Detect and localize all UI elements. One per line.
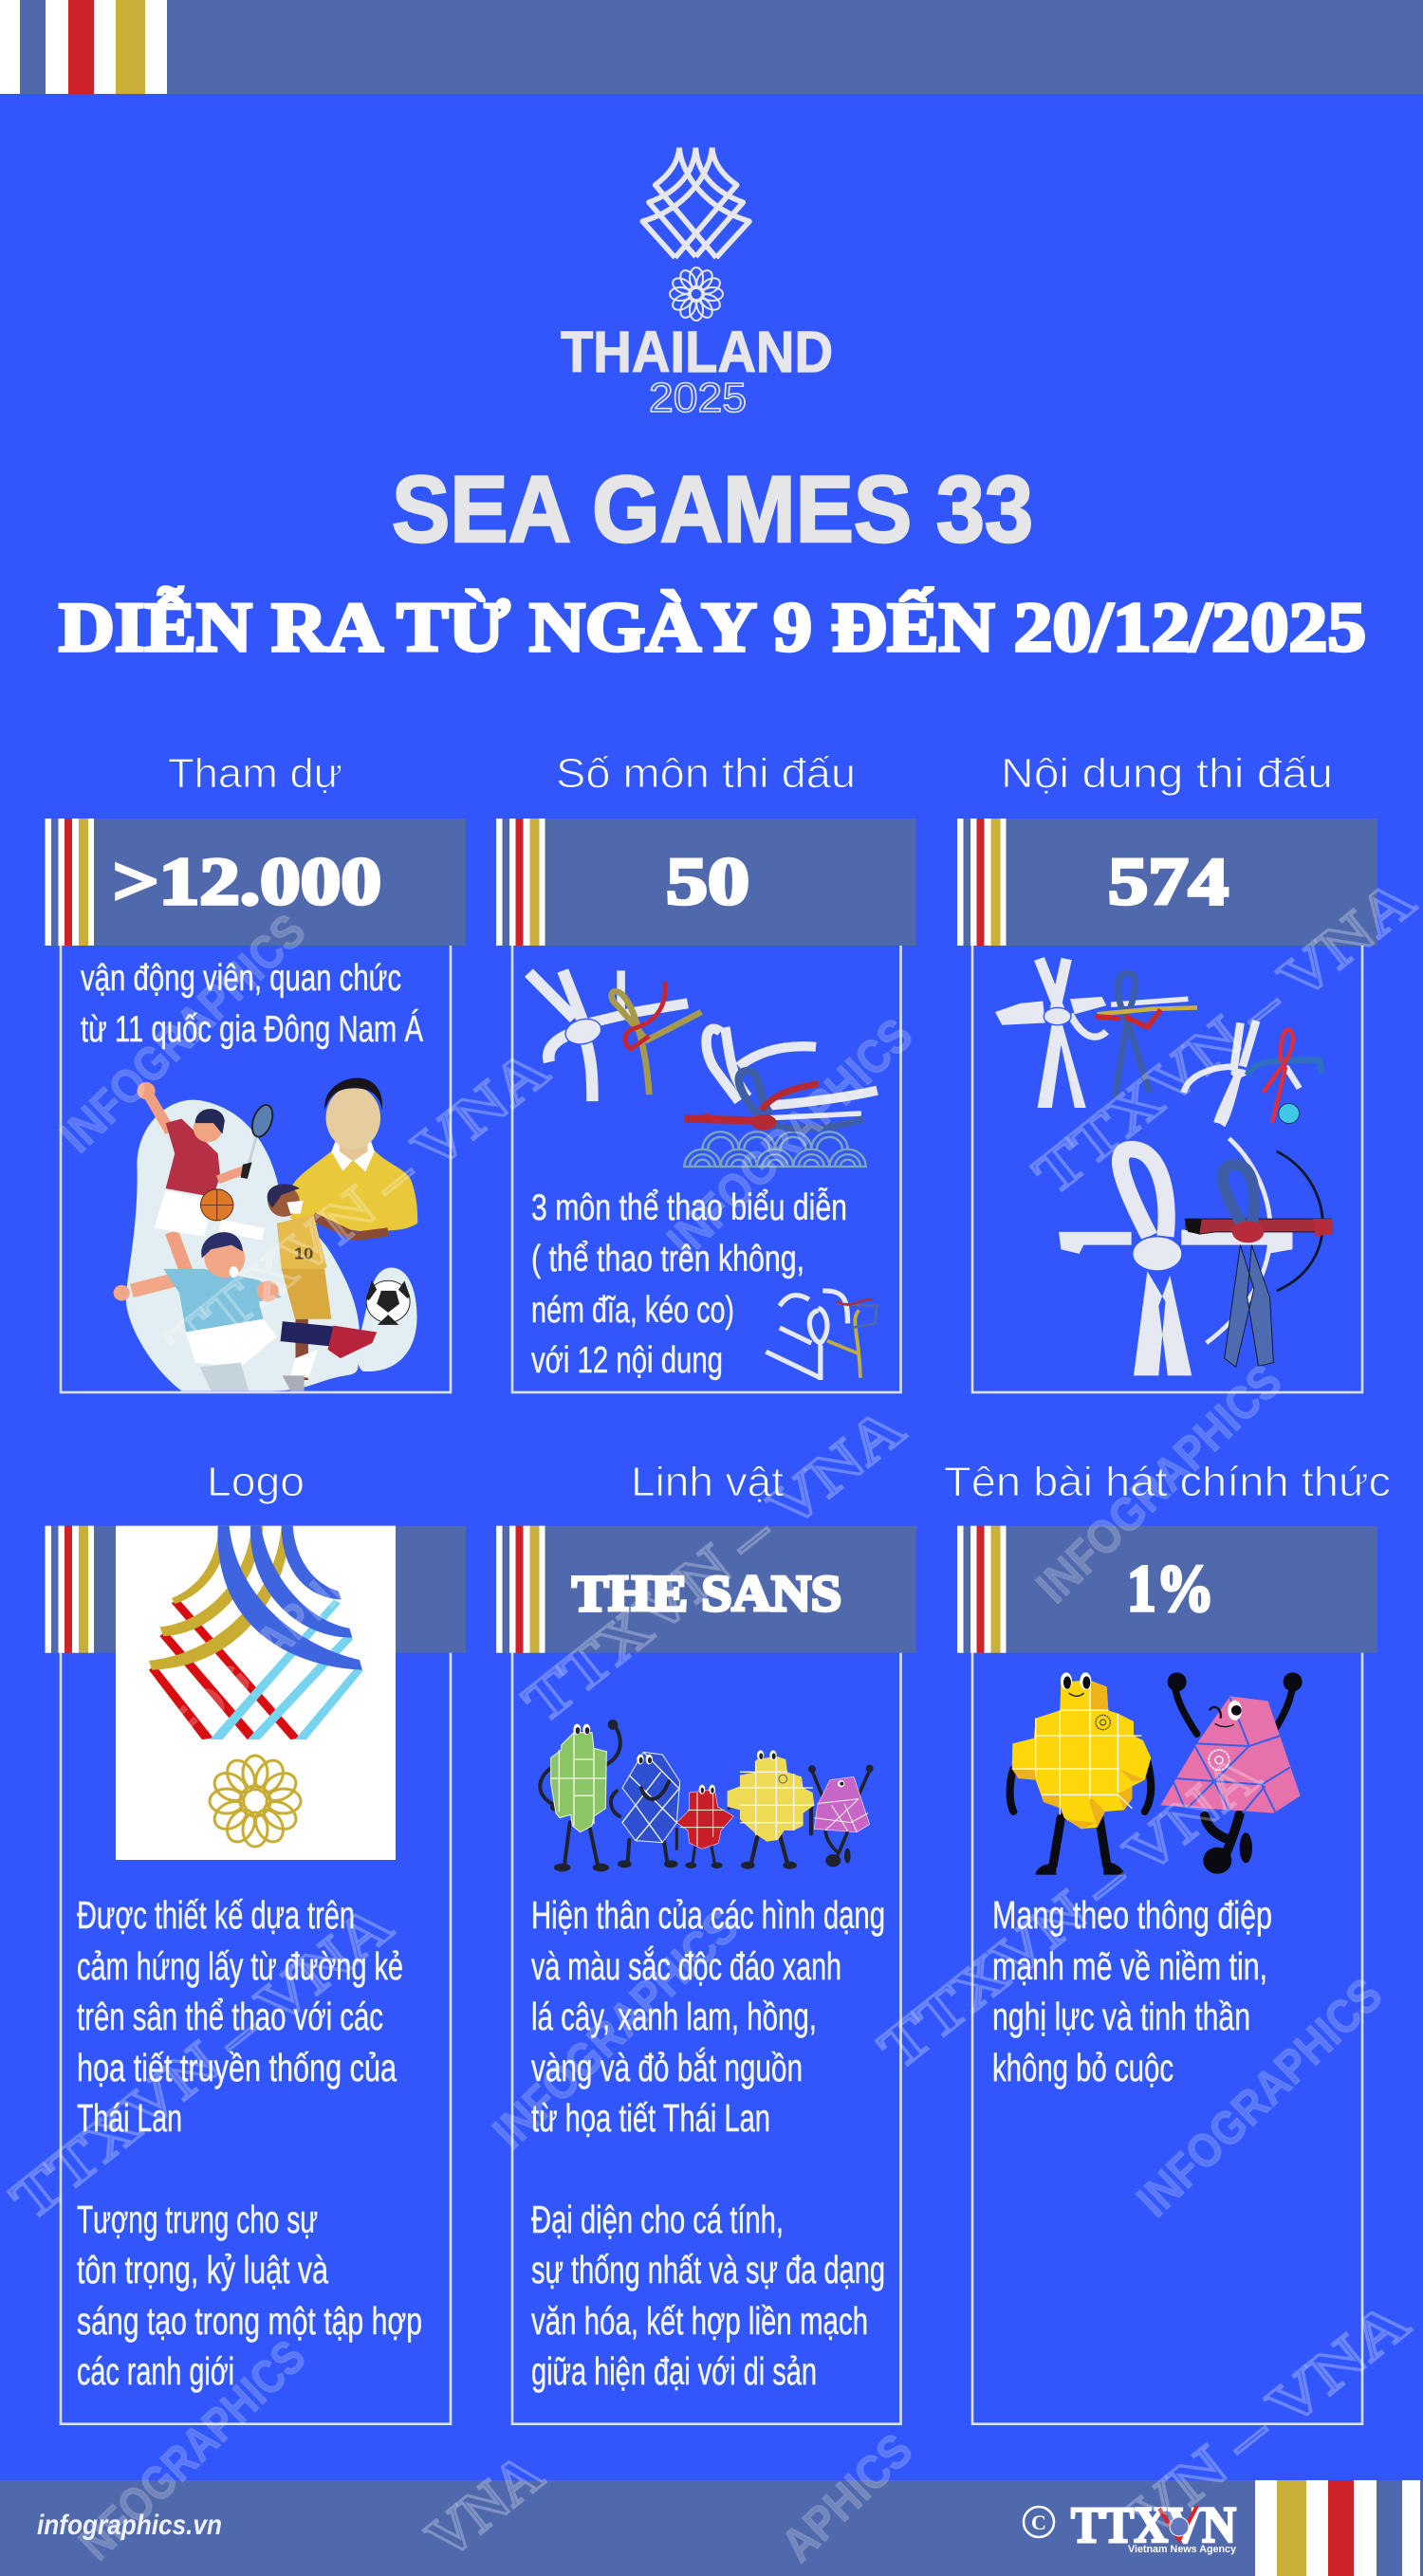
panel frame [512, 1612, 901, 2424]
description: Được thiết kế dựa trên [77, 1893, 355, 1937]
illustration: two large mascots [1010, 1672, 1303, 1875]
site name: infographics.vn [37, 2510, 222, 2541]
illustration: small ribbon [766, 1291, 878, 1380]
value: 574 [1108, 845, 1229, 919]
watermark overlay: TTXVN – VNA [511, 1396, 915, 1736]
icon: green mascot [540, 1720, 620, 1871]
description: và màu sắc độc đáo xanh [531, 1944, 841, 1988]
top header band with stripes [0, 0, 1423, 94]
description: tôn trọng, kỷ luật và [77, 2248, 328, 2291]
logo year: 2025 [649, 375, 747, 421]
description: Hiện thân của các hình dạng [531, 1893, 885, 1937]
icon: red mascot [676, 1785, 733, 1868]
icon: yellow mascot large [1010, 1672, 1151, 1875]
subtitle: dates: DIỄN RA TỪ NGÀY 9 ĐẾN 20/12/2025 [59, 587, 1366, 667]
description: vận động viên, quan chức [81, 958, 401, 999]
value: THE SANS [572, 1565, 841, 1622]
value bar [957, 1526, 1377, 1653]
illustration: archery ribbons [1059, 1138, 1333, 1375]
watermark overlay: INFOGRAPHICS [130, 1523, 396, 1782]
description: lá cây, xanh lam, hồng, [531, 1995, 817, 2038]
official logo on white card [116, 1526, 396, 1860]
heading: Tham dự [168, 750, 342, 797]
description: từ họa tiết Thái Lan [531, 2096, 770, 2140]
description [77, 1893, 422, 2393]
watermark overlay: TTXVN – VNA [867, 1742, 1271, 2082]
description [992, 1893, 1272, 2089]
logo wordmark: THAILAND [561, 320, 833, 384]
description [81, 958, 423, 1050]
copyright mark [1024, 2507, 1054, 2537]
heading: Tên bài hát chính thức [944, 1459, 1391, 1505]
watermark overlay: APHICS [771, 2423, 922, 2572]
illustration: shooting ribbons [995, 959, 1197, 1108]
watermark overlay: VNA [415, 2441, 555, 2571]
value bar [496, 819, 916, 946]
value bar [46, 1526, 466, 1653]
icon: purple mascot [808, 1765, 874, 1867]
watermark overlay: NFOGRAPHICS [69, 2329, 315, 2570]
watermark overlay [0, 868, 1423, 2572]
illustration: swimming ribbons [684, 1027, 878, 1167]
watermark overlay: VN – VNA [1116, 2290, 1421, 2550]
illustration: athletes: 10 [294, 1244, 313, 1262]
watermark overlay: INFOGRAPHICS [1127, 1968, 1393, 2227]
icon: pink mascot large [1160, 1672, 1303, 1874]
heading: Logo [207, 1459, 305, 1505]
description: văn hóa, kết hợp liền mạch [531, 2299, 868, 2343]
icon: blue mascot [611, 1752, 680, 1868]
watermark overlay: TTXVN – VNA [156, 1038, 560, 1377]
description: 3 môn thể thao biểu diễn [531, 1187, 847, 1228]
description: nghị lực và tinh thần [992, 1995, 1250, 2038]
description: giữa hiện đại với di sản [531, 2349, 817, 2393]
value bar [496, 1526, 916, 1653]
panel: Nội dung thi đấu [957, 750, 1377, 1392]
panel: Số môn thi đấu [496, 750, 916, 1392]
heading: Linh vật [631, 1459, 784, 1505]
heading: Số môn thi đấu [556, 750, 856, 797]
value bar [46, 819, 466, 946]
footer stripes [1255, 2480, 1420, 2576]
description: trên sân thể thao với các [77, 1995, 383, 2038]
copyright mark: C [1031, 2511, 1046, 2534]
title: SEA GAMES 33 [392, 456, 1033, 561]
illustration: white and gold ribbons [528, 970, 701, 1101]
watermark overlay: TTXVN – VNA [1022, 868, 1423, 1207]
description: Tượng trưng cho sự [77, 2198, 318, 2241]
description: cảm hứng lấy từ đường kẻ [77, 1944, 403, 1988]
icon: yellow mascot [728, 1750, 814, 1869]
description: với 12 nội dung [531, 1340, 723, 1381]
description: Mang theo thông điệp [992, 1893, 1272, 1937]
panel frame [972, 1612, 1362, 2424]
description: ( thể thao trên không, [531, 1239, 804, 1279]
panel frame [61, 939, 451, 1392]
watermark overlay: INFOGRAPHICS [1026, 1354, 1292, 1613]
description [531, 1187, 847, 1381]
description: Thái Lan [77, 2096, 182, 2140]
illustration: ball ribbons [1184, 1021, 1322, 1125]
panel frame [61, 1612, 451, 2424]
panel: Tham dự [46, 750, 466, 1392]
description: vàng và đỏ bắt nguồn [531, 2046, 803, 2089]
icon: flower emblem [670, 267, 723, 321]
description: Đại diện cho cá tính, [531, 2198, 784, 2241]
description: không bỏ cuộc [992, 2046, 1174, 2089]
watermark overlay: INFOGRAPHICS [50, 904, 316, 1163]
panel: Linh vật [496, 1459, 916, 2424]
description: ném đĩa, kéo co) [531, 1290, 734, 1331]
illustration: five mascots [540, 1720, 874, 1871]
footer band [0, 2480, 1423, 2576]
illustration: athletes [114, 1077, 417, 1391]
description: sự thống nhất và sự đa dạng [531, 2248, 885, 2291]
TTXVN logo: Vietnam News Agency [1128, 2544, 1237, 2555]
watermark overlay: INFOGRAPHICS [657, 1008, 923, 1267]
panel: Tên bài hát chính thức [944, 1459, 1391, 2424]
value bar [957, 819, 1377, 946]
TTXVN logo: TTXVN [1071, 2496, 1236, 2553]
description: từ 11 quốc gia Đông Nam Á [81, 1009, 423, 1050]
value: 50 [666, 845, 749, 919]
description: họa tiết truyền thống của [77, 2046, 397, 2089]
value: 1% [1127, 1553, 1214, 1626]
description [531, 1893, 885, 2393]
icon: roof emblem [642, 148, 749, 258]
heading: Nội dung thi đấu [1001, 750, 1333, 797]
description: các ranh giới [77, 2349, 234, 2393]
panel frame [972, 939, 1362, 1392]
value: >12.000 [113, 845, 381, 919]
description: mạnh mẽ về niềm tin, [992, 1944, 1267, 1988]
panel frame [512, 939, 901, 1392]
watermark overlay: TTXVN – VNA [0, 1893, 403, 2233]
description: sáng tạo trong một tập hợp [77, 2299, 422, 2343]
logo: Thailand 2025 emblem [561, 148, 833, 421]
watermark overlay: INFOGRAPHICS [483, 1900, 748, 2159]
panel: Logo [46, 1459, 466, 2424]
